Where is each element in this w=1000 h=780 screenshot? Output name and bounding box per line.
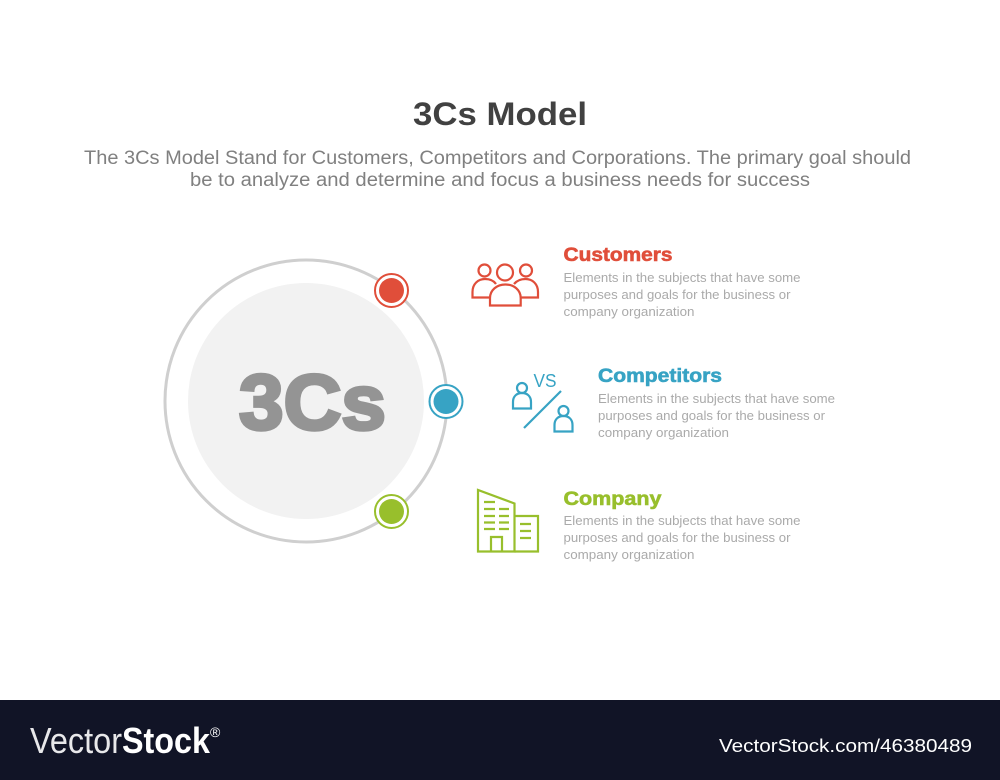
block: company: Company bbox=[564, 489, 662, 510]
marker: red bbox=[375, 274, 408, 307]
footer logo: Stock bbox=[122, 720, 211, 761]
marker: blue bbox=[430, 385, 462, 418]
subtitle bbox=[84, 148, 911, 191]
block: customers bbox=[564, 245, 800, 319]
block: competitors: Elements in the subjects that have some bbox=[598, 391, 835, 406]
title: 3Cs Model bbox=[413, 96, 587, 132]
icon: competitors bbox=[513, 371, 572, 432]
block: company: company organization bbox=[564, 547, 694, 562]
block: company: purposes and goals for the business or bbox=[564, 530, 791, 545]
subtitle: be to analyze and determine and focus a business needs for success bbox=[190, 170, 810, 191]
block: competitors bbox=[598, 366, 835, 440]
block: company: Elements in the subjects that have some bbox=[564, 513, 800, 528]
block: competitors: company organization bbox=[598, 425, 729, 440]
icon: customers bbox=[472, 264, 538, 306]
outer ring bbox=[165, 260, 447, 542]
footer logo: Vector bbox=[30, 720, 122, 761]
footer url: VectorStock.com/46380489 bbox=[719, 735, 972, 756]
block: competitors: Competitors bbox=[598, 366, 722, 387]
subtitle: The 3Cs Model Stand for Customers, Competitors and Corporations. The primary goal should bbox=[84, 148, 911, 169]
block: customers: purposes and goals for the business or bbox=[564, 287, 791, 302]
icon: competitors: VS bbox=[534, 371, 556, 391]
block: company bbox=[564, 489, 800, 562]
footer logo: ® bbox=[210, 724, 221, 740]
center label: 3Cs: 3Cs bbox=[239, 358, 386, 446]
inner circle bbox=[188, 283, 424, 519]
block: customers: company organization bbox=[564, 304, 694, 319]
icon: company bbox=[478, 490, 538, 552]
block: customers: Customers bbox=[564, 245, 672, 266]
marker: green bbox=[375, 495, 408, 528]
block: competitors: purposes and goals for the business or bbox=[598, 408, 826, 423]
footer bar bbox=[0, 700, 1000, 780]
footer logo bbox=[30, 720, 221, 761]
block: customers: Elements in the subjects that have some bbox=[564, 270, 800, 285]
